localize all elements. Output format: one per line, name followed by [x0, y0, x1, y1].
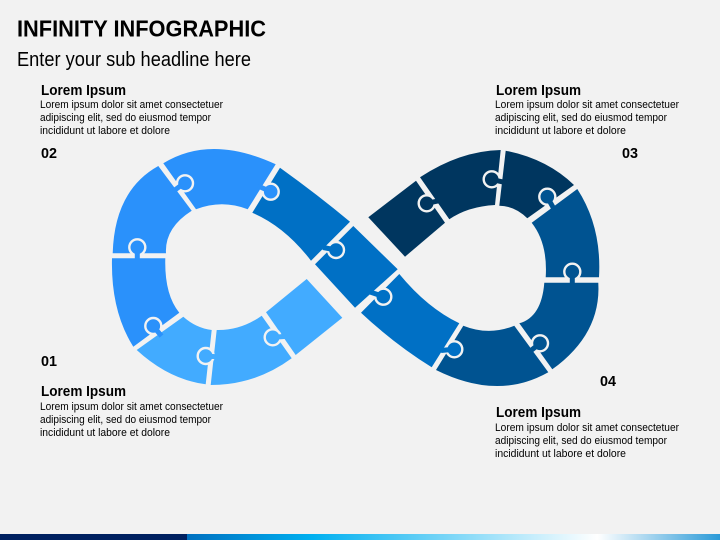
text block: 01: Lorem Ipsum — [41, 384, 126, 400]
text block: 02: adipiscing elit, sed do eiusmod tempor — [40, 112, 211, 124]
centre band: strong blue pieces — [252, 168, 459, 367]
text block: 01: Lorem ipsum dolor sit amet consectetuer — [40, 401, 223, 413]
title: INFINITY INFOGRAPHIC — [17, 16, 266, 42]
puzzle knobs — [129, 171, 580, 364]
text block: 02: Lorem Ipsum — [41, 83, 126, 99]
infinity puzzle diagram — [112, 149, 599, 386]
number 01: 01 — [41, 354, 57, 370]
footer bar — [0, 534, 720, 540]
number 02: 02 — [41, 146, 57, 162]
number 04: 04 — [600, 374, 616, 390]
text block: 03: adipiscing elit, sed do eiusmod tempor — [495, 112, 667, 124]
text block: 03: Lorem ipsum dolor sit amet consectetuer — [495, 99, 679, 111]
text block: 04: incididunt ut labore et dolore — [495, 448, 626, 460]
text block: 04: Lorem Ipsum — [496, 405, 581, 421]
text block: 03: incididunt ut labore et dolore — [495, 125, 626, 137]
text block: 04: adipiscing elit, sed do eiusmod tempor — [495, 435, 667, 447]
number 03: 03 — [622, 146, 638, 162]
text block: 02: Lorem ipsum dolor sit amet consectetuer — [40, 99, 223, 111]
section 03: navy pieces — [368, 150, 574, 257]
text block: 01: adipiscing elit, sed do eiusmod tempor — [40, 414, 211, 426]
section 01: light blue pieces — [137, 279, 342, 385]
text block: 01 — [40, 384, 223, 439]
subtitle: Enter your sub headline here — [17, 49, 251, 71]
text block: 04 — [495, 405, 679, 460]
text block: 03 — [495, 83, 679, 137]
text block: 04: Lorem ipsum dolor sit amet consectetuer — [495, 422, 679, 434]
text block: 01: incididunt ut labore et dolore — [40, 427, 170, 439]
text block: 02: incididunt ut labore et dolore — [40, 125, 170, 137]
text block: 02 — [40, 83, 223, 137]
text block: 03: Lorem Ipsum — [496, 83, 581, 99]
section 02: medium blue pieces — [112, 149, 276, 347]
section 04: deep blue pieces — [436, 189, 599, 386]
